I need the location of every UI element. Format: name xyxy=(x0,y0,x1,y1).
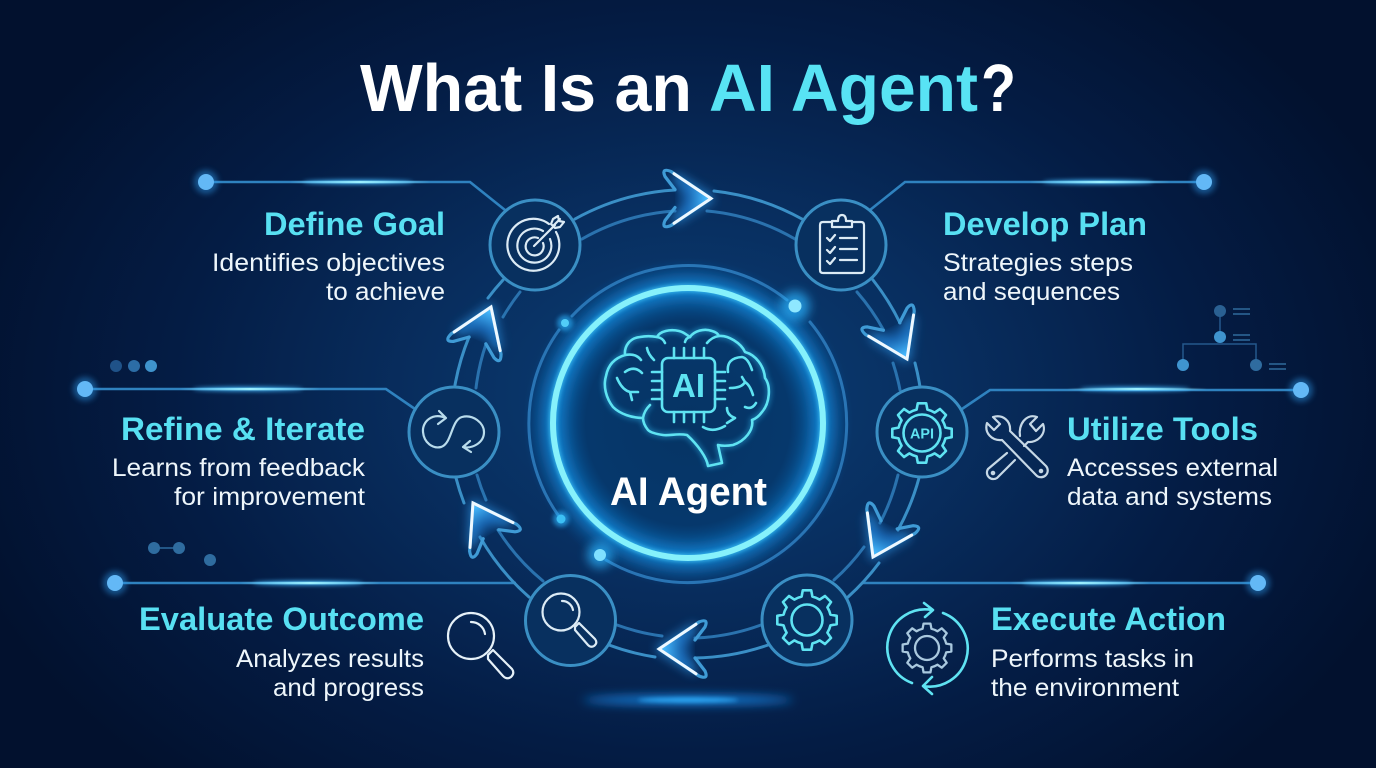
icon: gear xyxy=(777,590,837,650)
text: define goal xyxy=(212,206,445,306)
arrow: plan to tools xyxy=(861,304,933,371)
text: evaluate outcome: Evaluate Outcome xyxy=(139,601,424,637)
title: AI Agent xyxy=(709,51,978,126)
text: develop plan: Strategies steps xyxy=(943,249,1133,277)
text: evaluate outcome: and progress xyxy=(273,674,424,702)
node: execute action xyxy=(762,575,852,665)
text: evaluate outcome: Analyzes results xyxy=(236,645,424,673)
hub dots xyxy=(553,291,810,568)
arrow: evaluate to refine xyxy=(449,489,521,558)
bottom glow xyxy=(583,695,793,705)
hub bright ring xyxy=(553,288,823,558)
node: define goal xyxy=(490,200,580,290)
connector: evaluate outcome xyxy=(103,571,516,595)
text: define goal: Identifies objectives xyxy=(212,249,445,277)
icon: target xyxy=(507,216,564,271)
title: ? xyxy=(981,51,1016,126)
text: execute action: Execute Action xyxy=(991,601,1226,637)
hub glow xyxy=(523,258,853,588)
text: utilize tools xyxy=(1067,411,1278,511)
text: utilize tools: data and systems xyxy=(1067,483,1272,511)
title xyxy=(360,51,1016,126)
connector: define goal xyxy=(194,170,505,210)
connector: utilize tools xyxy=(962,378,1313,409)
central hub xyxy=(523,258,853,588)
icon: large magnifier xyxy=(448,613,513,678)
brain folds xyxy=(617,336,756,430)
text: develop plan: and sequences xyxy=(943,278,1120,306)
brain outline xyxy=(605,330,769,466)
icon: gear with cycle arrows xyxy=(887,603,968,694)
text: execute action xyxy=(991,601,1226,702)
decoration: three dots xyxy=(110,360,157,372)
text: refine and iterate: Learns from feedback xyxy=(112,454,366,482)
text: refine and iterate: Refine & Iterate xyxy=(121,411,365,447)
icon: clipboard xyxy=(820,215,864,273)
text: execute action: Performs tasks in xyxy=(991,645,1194,673)
text: refine and iterate: for improvement xyxy=(174,483,365,511)
text: define goal: Define Goal xyxy=(264,206,445,242)
arrow: tools to action xyxy=(848,502,919,570)
title: What Is an xyxy=(360,51,692,126)
node: utilize tools xyxy=(877,387,967,477)
text: define goal: to achieve xyxy=(326,278,445,306)
icon: magnifier xyxy=(542,594,596,647)
node: evaluate outcome xyxy=(526,576,616,666)
decoration: tree diagram xyxy=(1177,305,1286,371)
connector: develop plan xyxy=(870,170,1216,210)
cycle ring arcs xyxy=(455,190,920,658)
text: execute action: the environment xyxy=(991,674,1179,702)
connector: execute action xyxy=(862,571,1270,595)
text: utilize tools: Accesses external xyxy=(1067,454,1278,482)
icon: API gear: API xyxy=(910,426,934,442)
node: develop plan xyxy=(796,200,886,290)
AI chip xyxy=(662,358,715,412)
text: evaluate outcome xyxy=(139,601,424,702)
arrow: goal to plan xyxy=(664,170,711,227)
arrow: action to evaluate xyxy=(659,621,706,677)
text: utilize tools: Utilize Tools xyxy=(1067,411,1258,447)
hub label: AI Agent xyxy=(610,470,767,514)
hub thin ring xyxy=(529,266,847,583)
node: refine and iterate xyxy=(409,387,499,477)
text: develop plan xyxy=(943,206,1147,306)
arrow: refine to goal xyxy=(447,296,517,361)
chip label: AI xyxy=(672,367,705,404)
chip pins xyxy=(652,348,725,422)
text: develop plan: Develop Plan xyxy=(943,206,1147,242)
icon: wrench and spanner xyxy=(986,416,1048,479)
icon: loop arrows xyxy=(423,411,484,452)
decoration: linked dots xyxy=(148,542,216,566)
text: refine and iterate xyxy=(112,411,366,511)
icon: AI brain xyxy=(605,330,769,466)
connector: refine and iterate xyxy=(73,377,415,409)
